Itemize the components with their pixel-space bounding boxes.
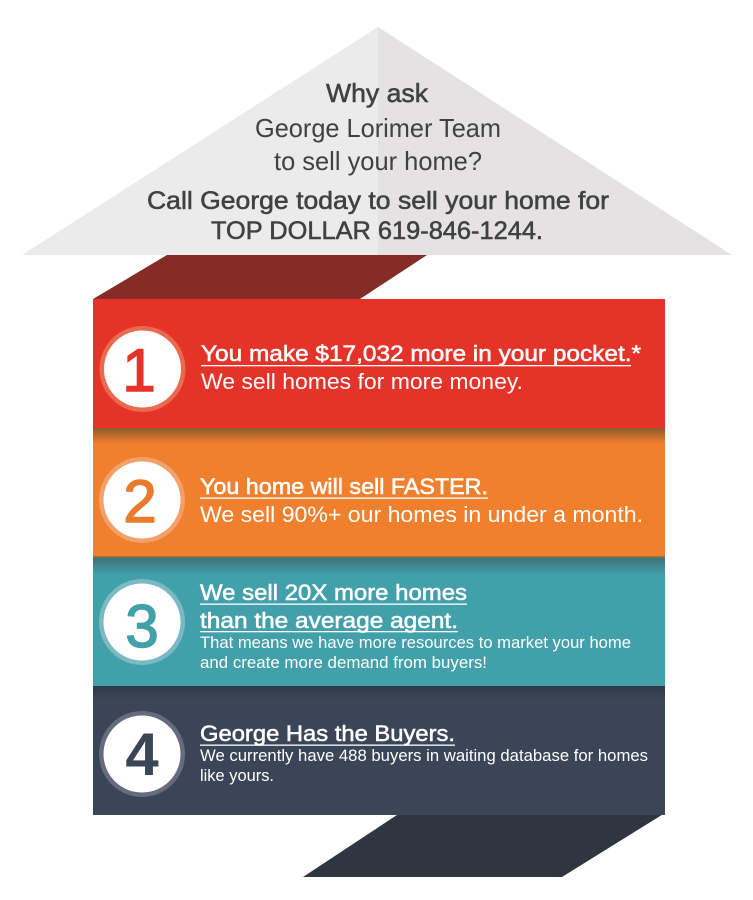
panel 3 text	[200, 580, 631, 672]
badge 2: 2	[123, 468, 157, 535]
roof heading: George Lorimer Team	[255, 113, 501, 143]
roof	[22, 27, 732, 255]
panel 4 text: George Has the Buyers.	[200, 721, 455, 746]
panel 2 text: We sell 90%+ our homes in under a month.	[200, 502, 643, 527]
panel 3 text: than the average agent.	[200, 608, 458, 633]
badge 1	[100, 326, 186, 412]
panel 3: teal	[93, 556, 665, 686]
panel 3 text: That means we have more resources to market your home	[200, 634, 631, 652]
panel 1: red	[93, 299, 665, 428]
panel 1 text: You make $17,032 more in your pocket.*	[201, 341, 641, 366]
roof heading: Why ask	[326, 78, 429, 108]
top fold	[93, 255, 427, 299]
panel 2 text	[200, 474, 643, 527]
roof heading: TOP DOLLAR 619-846-1244.	[211, 217, 543, 245]
panel 4: navy	[93, 686, 665, 815]
panel 1 text: We sell homes for more money.	[201, 369, 523, 394]
badge 1: 1	[122, 337, 156, 404]
panel 2: orange	[93, 428, 665, 557]
badge 2	[99, 457, 185, 543]
badge 3	[99, 579, 185, 665]
roof heading	[147, 78, 609, 245]
roof heading: Call George today to sell your home for	[147, 187, 609, 215]
panel 3 text: We sell 20X more homes	[200, 580, 467, 605]
badge 4: 4	[125, 721, 159, 788]
badge 4	[99, 711, 185, 797]
panel 1 text	[201, 341, 641, 394]
panel 2 text: You home will sell FASTER.	[200, 474, 488, 499]
panel 4 text: We currently have 488 buyers in waiting database for homes	[200, 747, 648, 765]
panel 3 text: and create more demand from buyers!	[200, 654, 487, 672]
roof heading: to sell your home?	[274, 146, 482, 176]
panel 4 text	[200, 721, 648, 785]
bottom fold	[303, 813, 665, 877]
panel 4 text: like yours.	[200, 767, 274, 785]
badge 3: 3	[125, 593, 159, 660]
